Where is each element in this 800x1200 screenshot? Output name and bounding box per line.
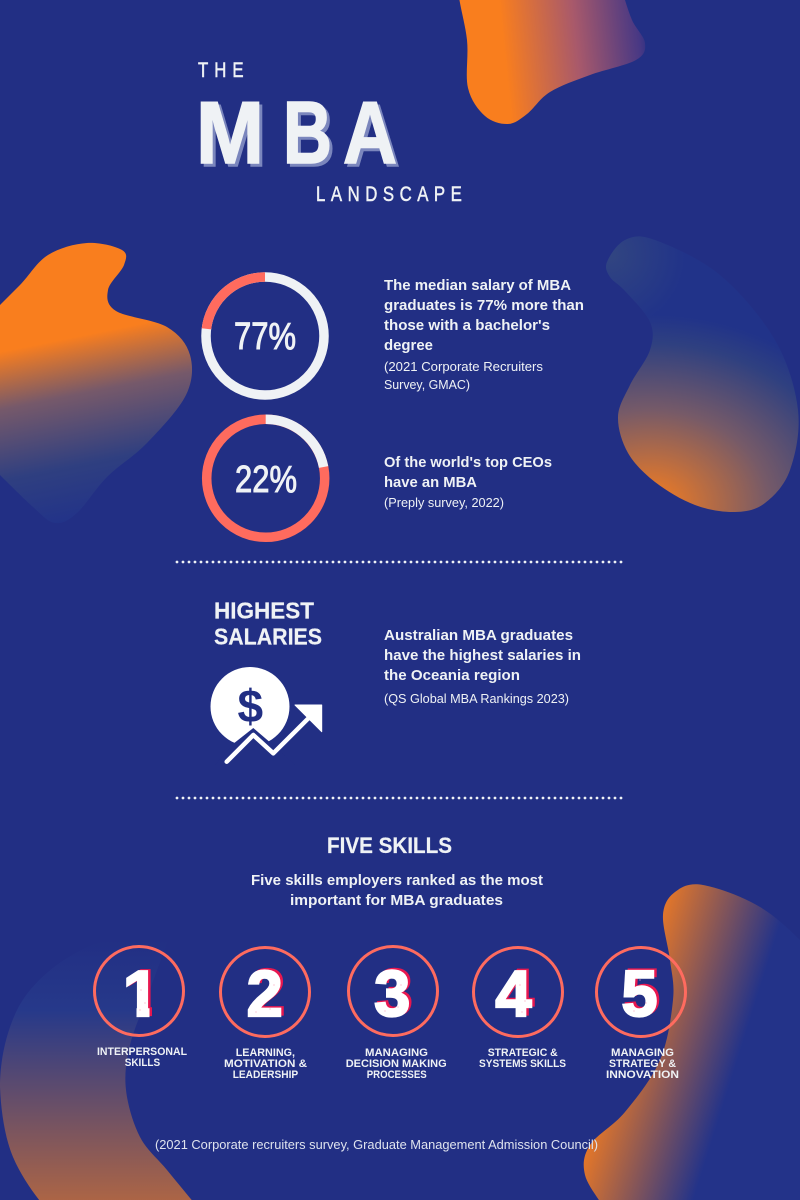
text: five skills intro xyxy=(251,872,543,909)
skill 3: managing decision making processes: MANAGING xyxy=(365,1047,428,1059)
text: salary statistic: (2021 Corporate Recruiters xyxy=(384,359,543,374)
title: A xyxy=(343,83,397,182)
text: salary statistic: degree xyxy=(384,337,433,354)
skill 5: managing strategy and innovation: 5 xyxy=(624,956,660,1028)
skill 1: interpersonal skills xyxy=(94,946,187,1069)
title: M xyxy=(199,86,267,185)
skill 4: strategic and systems skills: 4 xyxy=(498,956,534,1028)
blob: bottom right xyxy=(584,884,800,1200)
skill 3: managing decision making processes xyxy=(346,946,447,1081)
text: five skills intro: Five skills employers ranked as the most xyxy=(251,872,543,889)
skill 5: managing strategy and innovation: INNOVATION xyxy=(606,1069,679,1081)
skill 1: interpersonal skills: 1 xyxy=(125,956,162,1029)
donut chart: 22%: 22% xyxy=(235,459,297,501)
text: salary statistic xyxy=(384,277,584,392)
title: B xyxy=(283,83,332,182)
title: THE xyxy=(198,59,250,83)
skill 2: learning, motivation and leadership xyxy=(220,948,310,1081)
icon: dollar coin with rising arrow: $ xyxy=(238,680,263,732)
title: LANDSCAPE xyxy=(316,183,467,207)
skill 3: managing decision making processes: 3 xyxy=(374,957,410,1030)
skill 1: interpersonal skills: INTERPERSONAL xyxy=(97,1046,187,1058)
text: CEO statistic xyxy=(384,454,552,510)
skill 3: managing decision making processes: PROCESSES xyxy=(367,1069,427,1081)
title: A xyxy=(346,86,400,185)
text: CEO statistic: (Preply survey, 2022) xyxy=(384,495,504,510)
icon: dollar coin with rising arrow xyxy=(210,667,322,765)
title: B xyxy=(286,86,335,185)
skill 4: strategic and systems skills: STRATEGIC & xyxy=(488,1047,558,1059)
heading: highest salaries xyxy=(214,598,322,650)
skill 2: learning, motivation and leadership: 2 xyxy=(247,957,283,1030)
text: Australian salaries: (QS Global MBA Rankings 2023) xyxy=(384,691,569,706)
skill 2: learning, motivation and leadership: LEARNING, xyxy=(236,1047,295,1059)
skill 3: managing decision making processes: DECISION MAKING xyxy=(346,1058,447,1070)
blob: right orange and blue xyxy=(606,236,799,512)
skill 5: managing strategy and innovation: STRATEGY & xyxy=(609,1058,676,1070)
skill 1: interpersonal skills: SKILLS xyxy=(125,1057,160,1069)
skill 5: managing strategy and innovation xyxy=(596,948,686,1081)
skill 5: managing strategy and innovation: 5 xyxy=(621,957,658,1030)
title: M xyxy=(196,83,264,182)
text: salary statistic: those with a bachelor's xyxy=(384,317,550,334)
donut chart: 22% xyxy=(207,419,325,537)
text: Australian salaries: Australian MBA graduates xyxy=(384,627,573,644)
heading: five skills: FIVE SKILLS xyxy=(327,833,452,858)
text: CEO statistic: have an MBA xyxy=(384,474,477,491)
heading: highest salaries: HIGHEST xyxy=(214,598,314,624)
footer source: (2021 Corporate recruiters survey, Graduate Management Admission Council) xyxy=(155,1137,598,1152)
text: five skills intro: important for MBA graduates xyxy=(290,892,503,909)
text: salary statistic: graduates is 77% more than xyxy=(384,297,584,314)
donut chart: 77%: 77% xyxy=(234,316,296,358)
donut chart: 77% xyxy=(206,277,324,395)
skill 2: learning, motivation and leadership: 2 xyxy=(249,956,285,1028)
skill 3: managing decision making processes: 3 xyxy=(377,956,413,1028)
skill 4: strategic and systems skills: 4 xyxy=(495,957,532,1030)
skill 2: learning, motivation and leadership: MOTIVATION & xyxy=(224,1058,307,1070)
skill 1: interpersonal skills: 1 xyxy=(123,957,159,1030)
text: Australian salaries: the Oceania region xyxy=(384,667,520,684)
skill 5: managing strategy and innovation: MANAGING xyxy=(611,1047,674,1059)
text: CEO statistic: Of the world's top CEOs xyxy=(384,454,552,471)
blob: bottom left xyxy=(0,936,200,1200)
text: salary statistic: The median salary of MBA xyxy=(384,277,571,294)
skill 4: strategic and systems skills: SYSTEMS SKILLS xyxy=(479,1058,566,1070)
blob: left orange xyxy=(0,243,192,523)
blob: top orange xyxy=(458,0,645,124)
title xyxy=(196,59,467,207)
heading: highest salaries: SALARIES xyxy=(214,624,322,650)
text: Australian salaries: have the highest salaries in xyxy=(384,647,581,664)
text: salary statistic: Survey, GMAC) xyxy=(384,377,470,392)
text: Australian salaries xyxy=(384,627,581,706)
skill 4: strategic and systems skills xyxy=(474,948,566,1070)
skill 2: learning, motivation and leadership: LEADERSHIP xyxy=(233,1069,298,1081)
